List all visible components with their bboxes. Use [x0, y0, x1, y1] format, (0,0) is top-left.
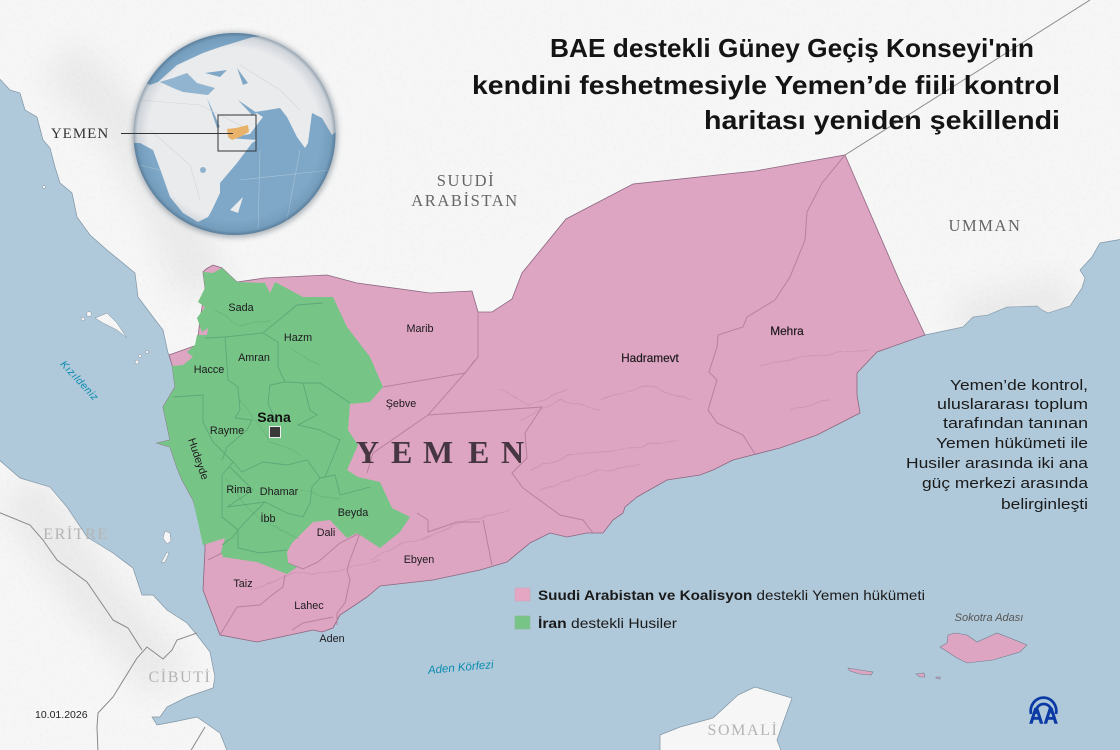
title: kendini feshetmesiyle Yemen’de fiili kontrol — [472, 70, 1060, 100]
terrain on Yemen — [250, 350, 870, 590]
annotation text: uluslararası toplum — [937, 396, 1088, 413]
province labels: Mehra — [770, 324, 804, 338]
province labels: Hazm — [284, 332, 312, 344]
country label: Umman: UMMAN — [948, 216, 1022, 235]
legend swatch: government — [515, 588, 530, 601]
title: haritası yeniden şekillendi — [704, 105, 1060, 135]
legend swatch: Houthis — [515, 616, 530, 629]
annotation text: belirginleşti — [1001, 496, 1088, 513]
province labels: Rayme — [210, 425, 244, 437]
land: Somalia coast — [660, 687, 792, 750]
big label: Yemen: YEMEN — [356, 434, 524, 470]
province labels: Dali — [317, 527, 335, 539]
legend — [515, 587, 925, 631]
land: Arabian peninsula — [0, 0, 1120, 500]
province labels: Ebyen — [404, 554, 434, 566]
capital marker — [270, 426, 280, 438]
title: BAE destekli Güney Geçiş Konseyi'nin — [550, 33, 1034, 63]
locator line — [121, 132, 233, 134]
legend text: government: Suudi Arabistan ve Koalisyon destekli Yemen hükümeti — [538, 587, 925, 603]
province labels: Sada — [228, 302, 254, 314]
province labels: Dhamar — [260, 486, 299, 498]
province labels: Aden — [319, 633, 345, 645]
country label: Eritre: ERİTRE — [43, 525, 109, 543]
annotation text: tarafından tanınan — [943, 415, 1088, 432]
province labels: İbb — [260, 512, 276, 525]
province labels: Amran — [238, 352, 270, 364]
province labels: Marib — [406, 323, 434, 335]
date: 10.01.2026 — [35, 709, 88, 721]
annotation text: Yemen’de kontrol, — [950, 377, 1088, 394]
province labels: Hadramevt — [621, 351, 680, 365]
locator globe — [130, 29, 341, 241]
province labels: Beyda — [338, 507, 368, 519]
country label: Somali: SOMALİ — [708, 721, 778, 739]
globe: Yemen highlight — [227, 125, 249, 140]
country label: Suudi Arabistan — [411, 171, 519, 210]
title — [472, 33, 1060, 135]
island label: Sokotra Adası: Sokotra Adası — [955, 612, 1023, 624]
AA logo: AA — [1029, 704, 1058, 728]
country label: Suudi Arabistan: SUUDİ — [437, 171, 495, 190]
province labels: Şebve — [386, 398, 416, 410]
globe: locator box — [218, 115, 256, 151]
annotation text — [906, 377, 1089, 513]
legend text: Houthis: İran destekli Husiler — [538, 615, 677, 631]
province labels: Hudeyde — [185, 437, 211, 481]
Sokotra islands — [848, 633, 1027, 679]
sea label: Kızıldeniz: Kızıldeniz — [58, 358, 101, 404]
province labels: Taiz — [233, 578, 253, 590]
province labels: Hacce — [194, 364, 224, 376]
annotation text: Husiler arasında iki ana — [906, 455, 1089, 472]
province labels: Rima — [226, 484, 252, 496]
province labels — [185, 302, 804, 645]
province labels: Lahec — [294, 600, 324, 612]
country label: Suudi Arabistan: ARABİSTAN — [411, 191, 519, 210]
land: Horn of Africa west — [0, 458, 228, 750]
annotation text: Yemen hükümeti ile — [936, 435, 1088, 452]
locator label: Yemen: YEMEN — [51, 126, 109, 142]
Red Sea islands — [42, 186, 171, 563]
country label: Cibuti: CİBUTİ — [149, 668, 211, 686]
annotation text: güç merkezi arasında — [922, 475, 1089, 492]
capital label: Sana: Sana — [257, 409, 291, 425]
sea label: Aden Körfezi: Aden Körfezi — [426, 659, 494, 677]
Yemen: Houthi area (green) — [157, 268, 410, 574]
Yemen: government area (pink) — [157, 155, 925, 642]
province borders (pink area) — [208, 155, 845, 635]
